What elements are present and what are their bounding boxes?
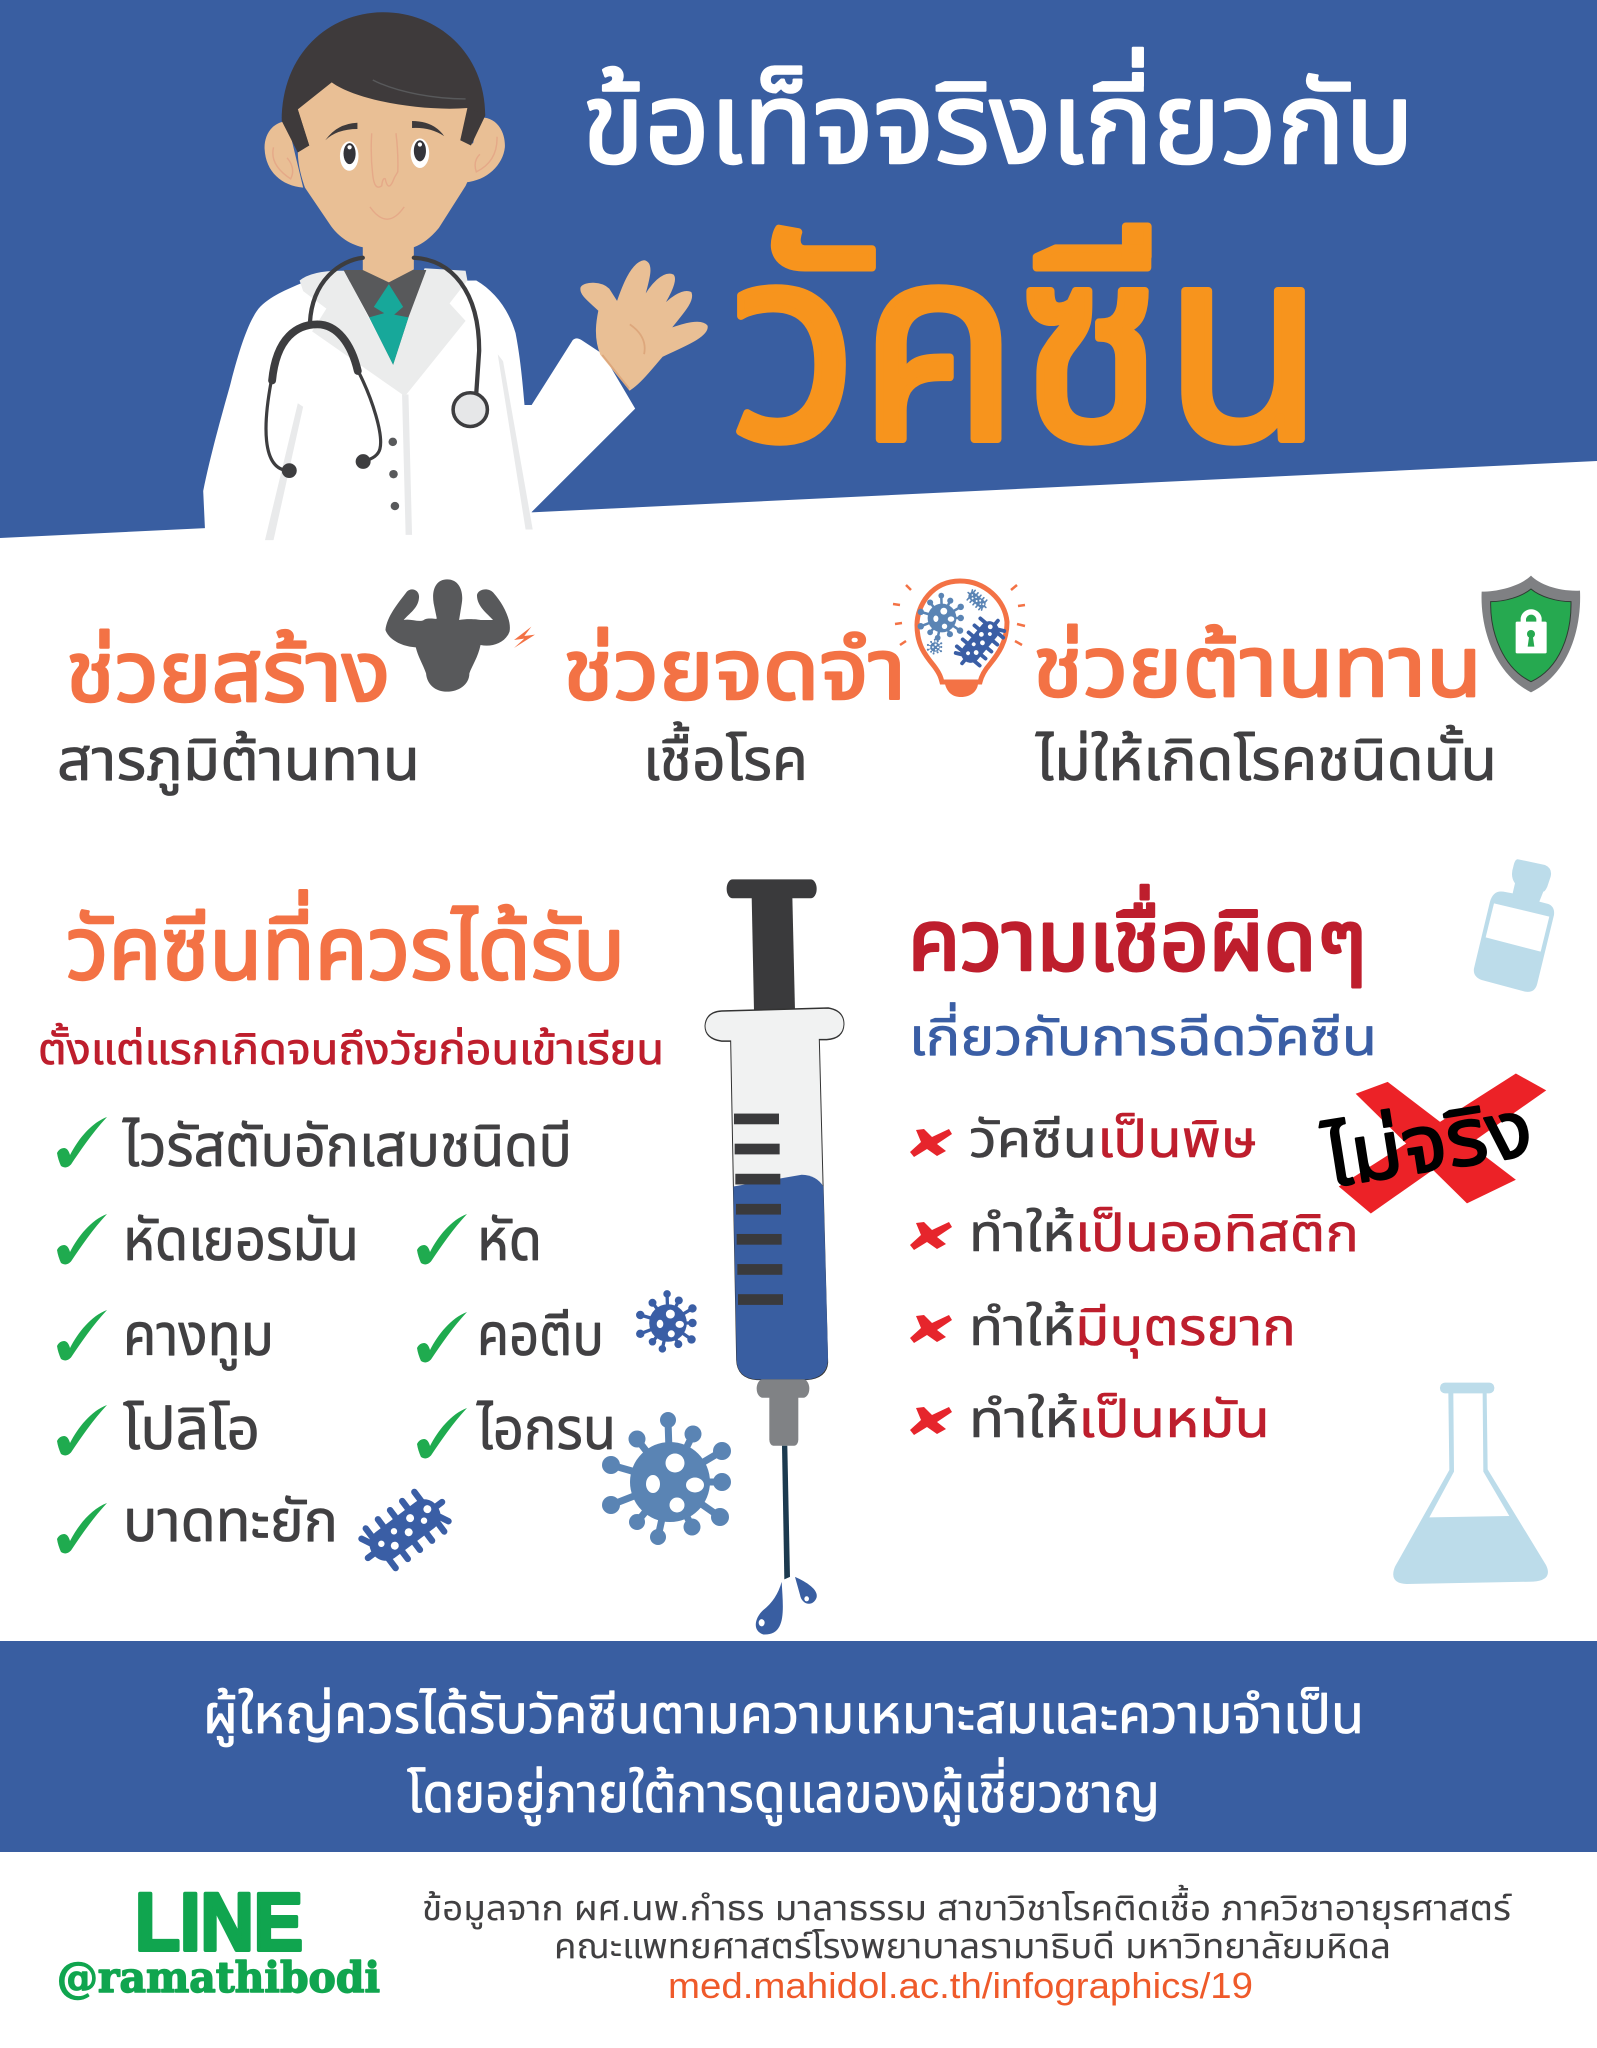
eyes [340, 139, 429, 171]
icon: bacteria [353, 1482, 457, 1578]
icon: muscle man [385, 579, 535, 692]
myth list: ทำให้มีบุตรยาก [969, 1299, 1296, 1359]
nose and mouth [273, 133, 497, 219]
panel: myths [908, 885, 1377, 1449]
neck [363, 242, 414, 282]
coat shading [265, 354, 533, 540]
vaccine list: ไวรัสตับอักเสบชนิดบี [122, 1114, 572, 1179]
myth list: ทำให้เป็นหมัน [969, 1391, 1270, 1449]
chest piece [453, 393, 487, 426]
doctor illustration [203, 12, 707, 540]
icon: flask [1393, 1383, 1548, 1584]
icon: light bulb with germs [893, 581, 1025, 697]
wrist and palm line [602, 324, 645, 389]
vaccine list: หัด [477, 1208, 542, 1273]
benefit 3: ไม่ให้เกิดโรคชนิดนั้น [1035, 724, 1497, 793]
benefit 1: สารภูมิต้านทาน [57, 728, 420, 795]
barrel [705, 1008, 844, 1379]
sideburns [282, 108, 485, 153]
vaccine list [122, 1114, 616, 1554]
hair highlight [373, 80, 466, 99]
banner text: ผู้ใหญ่ควรได้รับวัคซีนตามความเหมาะสมและความจำเป็น [203, 1685, 1364, 1747]
heading: ความเชื่อผิดๆ [908, 885, 1367, 988]
face [298, 82, 478, 247]
hair [282, 12, 485, 154]
benefit 1: ช่วยสร้าง [66, 625, 390, 719]
source credit: คณะแพทยศาสตร์โรงพยาบาลรามาธิบดี มหาวิทยาลัยมหิดล [554, 1927, 1391, 1966]
title line 1: ข้อเท็จจริงเกี่ยวกับ [582, 47, 1414, 188]
benefit 2: ช่วยจดจำ [563, 623, 906, 717]
stamp: big red x [1339, 1073, 1546, 1213]
vaccine list: คางทูม [123, 1303, 274, 1370]
source credit [422, 1884, 1513, 2006]
drops [756, 1577, 817, 1635]
myth list: วัคซีนเป็นพิษ [969, 1111, 1257, 1169]
benefit 1 [57, 625, 420, 795]
coat [203, 281, 635, 540]
eyebrows [325, 121, 444, 140]
drop highlights [759, 1596, 809, 1626]
LINE logo text [57, 1877, 380, 2002]
vaccine list: คอตีบ [477, 1303, 604, 1368]
vaccine liquid [733, 1175, 828, 1379]
LINE logo text: LINE [135, 1877, 303, 1968]
coat buttons [388, 438, 399, 510]
needle [782, 1446, 790, 1579]
bottom banner [0, 1641, 1597, 1852]
title line 2: วัคซีน [730, 196, 1324, 497]
scale marks [734, 1114, 783, 1305]
source credit: ข้อมูลจาก ผศ.นพ.กำธร มาลาธรรม สาขาวิชาโรคติดเชื้อ ภาควิชาอายุรศาสตร์ [422, 1884, 1513, 1929]
bottom banner: โดยอยู่ภายใต้การดูแลของผู้เชี่ยวชาญ [407, 1757, 1160, 1826]
stethoscope [266, 258, 479, 471]
collar [300, 268, 467, 396]
ears [265, 117, 505, 188]
vaccine list: หัดเยอรมัน [123, 1208, 359, 1273]
heading: วัคซีนที่ควรได้รับ [66, 890, 625, 998]
myth list [969, 1111, 1359, 1449]
stamp text: ไม่จริง [1317, 1083, 1538, 1204]
check marks [57, 1117, 467, 1553]
icon: shield with lock [1482, 576, 1580, 692]
red x marks [910, 1129, 952, 1435]
tie [369, 284, 408, 365]
header background [0, 0, 1597, 538]
icon: small virus [636, 1290, 697, 1353]
source credit: med.mahidol.ac.th/infographics/19 [668, 1965, 1253, 2006]
benefit 2 [563, 623, 906, 793]
myth list: ทำให้เป็นออทิสติก [969, 1205, 1359, 1263]
subheading: เกี่ยวกับการฉีดวัคซีน [909, 1002, 1377, 1067]
earpieces [282, 454, 371, 478]
vaccine list: โปลิโอ [123, 1397, 260, 1462]
hub [757, 1379, 809, 1446]
vaccine list: บาดทะยัก [123, 1489, 338, 1554]
icon: large virus [602, 1412, 731, 1545]
panel: recommended vaccines [38, 890, 664, 1554]
benefit 3: ช่วยต้านทาน [1033, 620, 1482, 714]
benefit 2: เชื้อโรค [643, 721, 808, 793]
icon: vaccine bottle [1474, 859, 1554, 992]
shirt [344, 270, 426, 365]
subheading: ตั้งแต่แรกเกิดจนถึงวัยก่อนเข้าเรียน [38, 1022, 664, 1074]
vaccine list: ไอกรน [476, 1397, 616, 1462]
LINE logo text: @ramathibodi [57, 1953, 380, 2002]
syringe [705, 879, 844, 1635]
benefit 3 [1033, 620, 1497, 793]
plunger [727, 879, 817, 1011]
waving hand [581, 261, 707, 389]
